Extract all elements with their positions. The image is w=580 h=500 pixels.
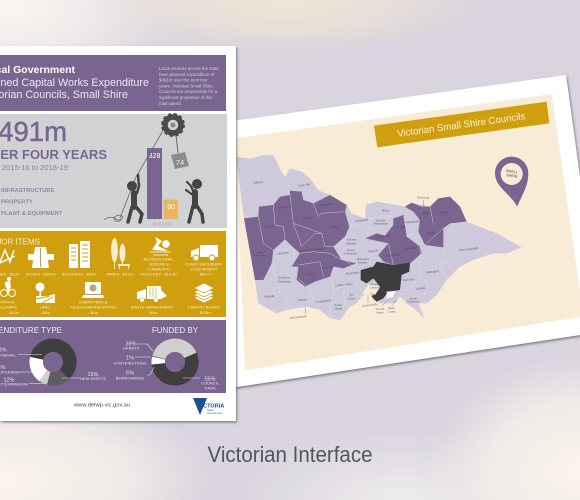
header intro text: Councils are responsible for a	[159, 89, 218, 94]
map: council labels: Swan Hill	[298, 182, 310, 188]
icon: small shire map pin: SHIRE	[506, 173, 518, 179]
legend: INFRASTRUCTURE	[1, 188, 55, 194]
panel: header	[0, 55, 226, 111]
icon: garbage truck	[137, 286, 167, 302]
icon: person pulling	[127, 175, 142, 222]
map: council labels: Wellington	[426, 269, 440, 274]
icon: parks	[111, 238, 130, 269]
major item labels: FACILITIES - $10.4m	[141, 272, 177, 276]
logo: Victoria State Government	[193, 398, 224, 415]
bar chart: $MILLION	[153, 222, 172, 226]
caption: Victorian Interface	[208, 442, 372, 467]
map: council labels: Bass	[389, 306, 395, 310]
icon: rope	[104, 127, 165, 221]
icon: small shire map pin: SMALL	[506, 169, 518, 174]
major item labels: ROADS - $247m	[26, 272, 56, 276]
header intro text	[159, 66, 219, 106]
panel: expenditure and funding: FUNDED BY	[152, 326, 199, 335]
map: council labels: Warrnambool	[290, 314, 307, 320]
major item labels: - $8m	[40, 310, 50, 315]
panel: map card	[225, 75, 580, 389]
bar chart: 90	[167, 204, 175, 211]
map sheet	[235, 94, 580, 371]
header intro text: total spend.	[159, 101, 182, 106]
map: council labels: Greater	[370, 282, 380, 286]
map: council labels: Towong	[438, 210, 449, 215]
logo: Victoria State Government: State	[207, 408, 214, 412]
map: council labels: Loddon	[329, 224, 339, 229]
major item labels: WASTE MANAGEMENT	[131, 304, 174, 310]
map: council labels: Pyrenees	[322, 265, 335, 270]
icon: library books	[194, 283, 214, 303]
legend: PLANT & EQUIPMENT	[1, 211, 63, 217]
map: council labels: Island	[376, 310, 384, 314]
icon: land	[36, 282, 55, 303]
map: council labels: Gannawarra	[317, 201, 333, 207]
bar chart	[147, 148, 178, 226]
panel: total spend	[0, 114, 227, 228]
map: council labels: Colac	[335, 303, 343, 307]
map: council labels: Shepparton	[373, 222, 388, 226]
map: north east small shires	[405, 197, 467, 247]
map: council labels: Campaspe	[355, 218, 369, 223]
donut labels: 15%	[87, 372, 99, 378]
header intro text: $491m over the next four	[159, 78, 208, 83]
title banner	[374, 102, 549, 147]
donut labels: 55%	[204, 376, 216, 382]
map: council labels: Baw Baw	[402, 277, 416, 282]
donut labels: CONTRIBUTIONS	[113, 360, 147, 366]
map: council labels: Northern Grampians	[299, 246, 325, 253]
header intro text: have planned expenditure of	[159, 72, 215, 77]
map: council labels: Moira	[382, 208, 389, 212]
map: council labels: Benalla	[396, 224, 406, 229]
donut labels: 12%	[3, 378, 15, 384]
map: council labels: Gippsland	[407, 300, 420, 304]
map: council labels: Wimmera	[254, 254, 266, 258]
icon: swimmer	[150, 237, 171, 255]
map: council labels: Hindmarsh	[262, 224, 277, 229]
map: council labels: Surf	[349, 292, 354, 296]
donut labels	[0, 342, 220, 390]
title banner: Victorian Small Shire Councils	[397, 111, 526, 140]
major item labels: RECREATIONAL,	[143, 256, 175, 262]
donut labels: 39%	[125, 342, 137, 348]
donut labels: 5%	[126, 370, 134, 376]
map: council labels: Queenscliffe	[362, 302, 378, 308]
map: council labels: East Gippsland	[459, 246, 479, 252]
icon: truck	[191, 245, 218, 261]
map: council labels: South	[410, 296, 417, 300]
cream map background	[235, 94, 580, 371]
icon: bridge	[0, 250, 15, 263]
major item labels: COMMUNITY	[147, 266, 171, 272]
map: council labels: Macedon	[357, 257, 369, 261]
map: council labels: Strathbogie	[376, 233, 391, 240]
major item labels: PARKS - $4.2m	[106, 272, 134, 276]
map: council labels: Southern	[278, 276, 290, 280]
map: council labels: Greater	[376, 218, 386, 222]
icon: cyclist	[0, 277, 16, 296]
map: council labels: Wodonga	[417, 195, 430, 199]
map: council labels: Mitchell	[368, 248, 379, 253]
panel: major items	[0, 231, 226, 317]
map: council labels: Mildura	[253, 180, 263, 185]
header intro text: significant proportion of this	[159, 95, 213, 100]
map: council labels: Yarriambiack	[277, 204, 294, 210]
major item labels: LIBRARY BOOKS	[188, 304, 220, 310]
header intro text: Local councils across the state	[159, 66, 219, 71]
map: council labels: Alpine	[426, 231, 434, 235]
website url: www.delwp.vic.gov.au	[73, 402, 130, 408]
major item labels: - $64 m	[197, 272, 211, 276]
map: council labels: Wangaratta	[405, 219, 420, 224]
icon: small shire map pin	[495, 157, 528, 207]
chart: funding donut	[158, 345, 192, 379]
bar chart: 328	[149, 153, 160, 160]
map: council labels: Greater	[347, 238, 356, 242]
icon: roads	[28, 247, 54, 268]
map: council labels: Geelong	[370, 286, 381, 290]
icon: person standing	[186, 179, 203, 222]
panel: expenditure and funding	[0, 320, 226, 393]
donut labels: NEW ASSETS	[80, 376, 106, 381]
icon: gear	[162, 114, 184, 136]
major item labels: PLANT, MACHINERY	[185, 262, 223, 266]
header intro text: years. Victorian Small Shire	[159, 83, 213, 88]
map: council labels: Ararat	[306, 272, 314, 277]
logo: Victoria State Government: Government	[207, 411, 223, 415]
chart: expenditure donut	[36, 345, 70, 379]
major item labels: & EQUIPMENT	[191, 266, 218, 272]
major item labels: - $6m	[88, 310, 98, 315]
major item labels: COMPUTERS &	[79, 300, 108, 304]
major item labels: - $0.8m	[197, 310, 211, 315]
icon: hanging box: 74	[176, 158, 184, 167]
major item labels: - $6m	[147, 310, 157, 315]
major item labels: LEISURE &	[149, 262, 170, 266]
map: leader lines	[305, 200, 423, 314]
map: council labels: Mount	[347, 248, 355, 252]
map: council labels	[253, 180, 479, 320]
map: council labels: Moorabool	[346, 270, 360, 276]
map: council labels: Coast	[348, 296, 355, 300]
map: metropolitan Melbourne	[361, 262, 410, 302]
map: council labels: Horsham	[277, 250, 290, 256]
map: council labels: Murrindindi	[386, 252, 401, 258]
map: boundaries	[258, 195, 447, 318]
legend	[1, 188, 63, 217]
map: Port Phillip Bay	[362, 284, 380, 295]
map: council labels: Otway	[334, 307, 343, 311]
donut leader lines	[18, 344, 200, 384]
donut labels: COUNCIL	[201, 380, 220, 386]
legend: PROPERTY	[1, 199, 33, 205]
logo: Victoria State Government: VICTORIA	[198, 404, 224, 410]
map: council labels: Golden Plains	[335, 282, 353, 288]
map: council labels: Moyne	[298, 297, 307, 302]
map: council labels: Glenelg	[264, 294, 275, 299]
map: council labels: Ranges	[358, 260, 368, 264]
map: council labels: Bendigo	[346, 241, 357, 245]
major item labels: BUILDINGS - $82m	[62, 272, 96, 276]
map: council labels: Latrobe	[416, 286, 426, 291]
map: central small shires	[365, 215, 422, 265]
map: council labels: Grampians	[277, 279, 291, 283]
map: council labels: Corangamite	[315, 298, 332, 304]
map: Victoria base regions	[236, 155, 522, 320]
map: council labels: Buloke	[303, 215, 312, 220]
donut labels: GRANTS	[123, 346, 140, 350]
map: council labels: Indigo	[422, 211, 430, 215]
major item labels: TELECOMMUNICATIONS	[70, 304, 116, 310]
major item labels: LAND	[40, 304, 50, 310]
major item labels	[0, 256, 223, 315]
icon: buildings	[69, 241, 90, 268]
map: council labels: Alexander	[344, 251, 357, 255]
map: council labels: Coast	[388, 309, 396, 313]
icon: hanging box	[171, 135, 189, 169]
map: council labels: French	[376, 307, 385, 311]
icon: laptop	[82, 282, 104, 298]
panel: poster	[0, 46, 236, 421]
map: western small shires	[244, 191, 356, 287]
donut labels: 1%	[126, 356, 134, 362]
map: council labels: Mansfield	[404, 245, 417, 251]
panel: total spend: 2015-16 to 2018-19	[2, 163, 68, 172]
major item labels: - $11m	[7, 310, 19, 315]
donut labels: BORROWINGS	[116, 376, 144, 380]
map: council labels: West	[257, 250, 263, 254]
donut labels: CASH	[204, 386, 216, 390]
map: French Island	[387, 291, 395, 299]
